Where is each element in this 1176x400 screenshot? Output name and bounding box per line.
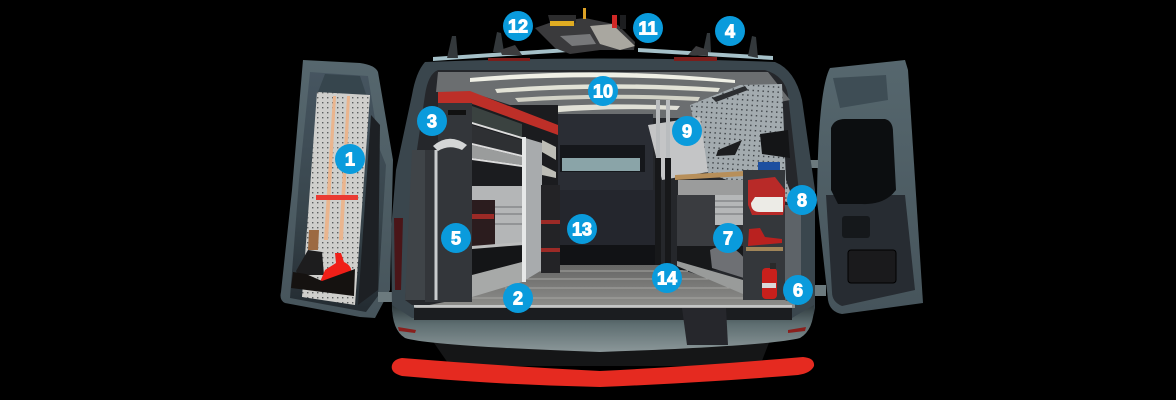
fan tool holder bbox=[433, 139, 467, 151]
van body bbox=[391, 58, 815, 336]
red shovel bbox=[320, 253, 351, 282]
shelf bins bbox=[472, 106, 522, 137]
tail-light left bbox=[394, 218, 403, 290]
red top rail bbox=[438, 91, 558, 135]
left rear door bbox=[280, 60, 393, 318]
end panel bbox=[425, 103, 472, 302]
marker 10: 10 bbox=[593, 82, 613, 102]
marker 14: 14 bbox=[657, 268, 677, 288]
door hinges bbox=[378, 160, 826, 302]
white side panel bbox=[648, 117, 708, 180]
marker 5 bbox=[441, 223, 471, 253]
underbody chassis bbox=[432, 340, 770, 366]
red paper dispenser bbox=[748, 177, 785, 215]
marker 3 bbox=[417, 106, 447, 136]
marker 7 bbox=[713, 223, 743, 253]
marker 2: 2 bbox=[513, 288, 523, 308]
marker 9: 9 bbox=[682, 122, 692, 142]
marker 13: 13 bbox=[572, 220, 592, 240]
marker 14 bbox=[652, 263, 682, 293]
right end panel bbox=[743, 170, 801, 300]
marker 13 bbox=[567, 214, 597, 244]
marker 10 bbox=[588, 76, 618, 106]
marker 4 bbox=[715, 16, 745, 46]
left shelving unit bbox=[405, 91, 560, 302]
black bracket tools bbox=[760, 130, 790, 158]
rear window bbox=[560, 145, 645, 172]
ceiling bbox=[436, 72, 790, 118]
cargo poles bbox=[655, 100, 671, 265]
roof rack clamps bbox=[500, 45, 708, 56]
marker 6: 6 bbox=[793, 280, 803, 300]
lower door trim bbox=[826, 195, 915, 306]
right pegboard wall bbox=[648, 84, 795, 205]
marker 8: 8 bbox=[797, 190, 807, 210]
base panel bbox=[472, 246, 522, 275]
marker 1: 1 bbox=[345, 150, 355, 170]
pegboard organiser bbox=[291, 92, 370, 305]
number markers bbox=[335, 11, 817, 313]
tool rod bbox=[434, 150, 438, 300]
cargo interior bbox=[405, 70, 800, 305]
mud flap bbox=[682, 308, 728, 345]
right rear door bbox=[817, 60, 923, 314]
marker 4: 4 bbox=[725, 22, 735, 42]
drawers bbox=[472, 186, 522, 200]
back wall bbox=[555, 114, 655, 266]
cargo floor bbox=[414, 265, 795, 320]
paper roll bbox=[751, 197, 783, 212]
dustpan bbox=[296, 250, 324, 275]
black trolley bbox=[541, 185, 560, 273]
marker 11: 11 bbox=[638, 18, 658, 38]
brush bbox=[308, 230, 319, 250]
door net pocket bbox=[848, 250, 896, 283]
wood top bbox=[675, 171, 745, 180]
brake lights bbox=[488, 57, 717, 61]
marker 7: 7 bbox=[723, 228, 733, 248]
bumper bbox=[392, 305, 814, 352]
tablet holder bbox=[716, 140, 742, 156]
marker 5: 5 bbox=[451, 228, 461, 248]
marker 1 bbox=[335, 144, 365, 174]
toolbox cases bbox=[472, 200, 495, 246]
roof ladder system bbox=[535, 8, 635, 54]
silver partition bbox=[522, 137, 542, 282]
marker 11 bbox=[633, 13, 663, 43]
marker 8 bbox=[787, 185, 817, 215]
tray bbox=[291, 269, 355, 296]
marker 12: 12 bbox=[508, 16, 528, 36]
red vice bbox=[748, 228, 782, 246]
marker 9 bbox=[672, 116, 702, 146]
marker 12 bbox=[503, 11, 533, 41]
roof rack bbox=[433, 32, 773, 61]
brand tag bbox=[448, 110, 466, 115]
marker 3: 3 bbox=[427, 112, 437, 132]
base panel bbox=[677, 261, 743, 294]
right workbench bbox=[675, 171, 745, 294]
marker 6 bbox=[783, 275, 813, 305]
red rear step bbox=[392, 357, 814, 387]
fire extinguisher bbox=[762, 263, 777, 299]
door window bbox=[831, 119, 896, 204]
marker 2 bbox=[503, 283, 533, 313]
